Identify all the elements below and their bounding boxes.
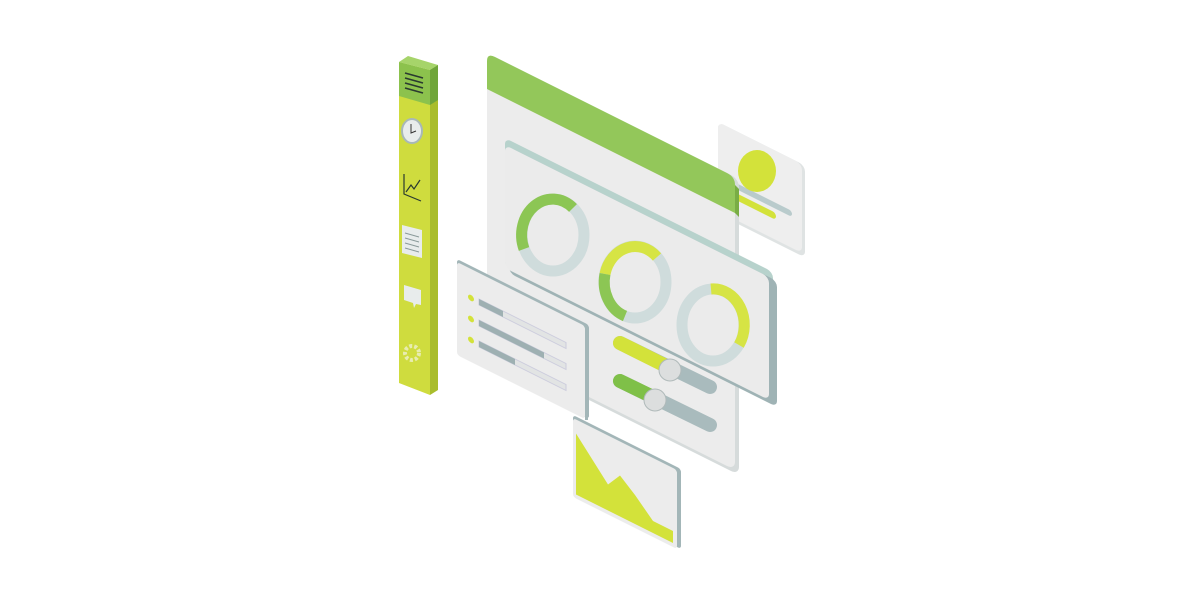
sliders <box>620 343 710 425</box>
small card top right <box>718 122 805 258</box>
header bar <box>487 53 735 213</box>
donut 2 <box>604 246 666 318</box>
donut 3 <box>682 289 744 361</box>
circle <box>738 150 776 192</box>
icon: chat <box>404 285 421 308</box>
chart panel <box>573 415 681 551</box>
icon: clock <box>402 119 422 143</box>
icon: menu <box>405 73 423 93</box>
area chart <box>576 434 673 543</box>
donut panel <box>505 138 777 407</box>
donut 1 <box>522 199 584 271</box>
sidebar <box>399 56 438 395</box>
icon: gear <box>405 346 419 360</box>
icon: document <box>402 225 422 258</box>
main window <box>487 53 739 475</box>
icon: chart <box>404 174 421 201</box>
list panel <box>457 259 589 421</box>
connector strut <box>585 400 588 420</box>
